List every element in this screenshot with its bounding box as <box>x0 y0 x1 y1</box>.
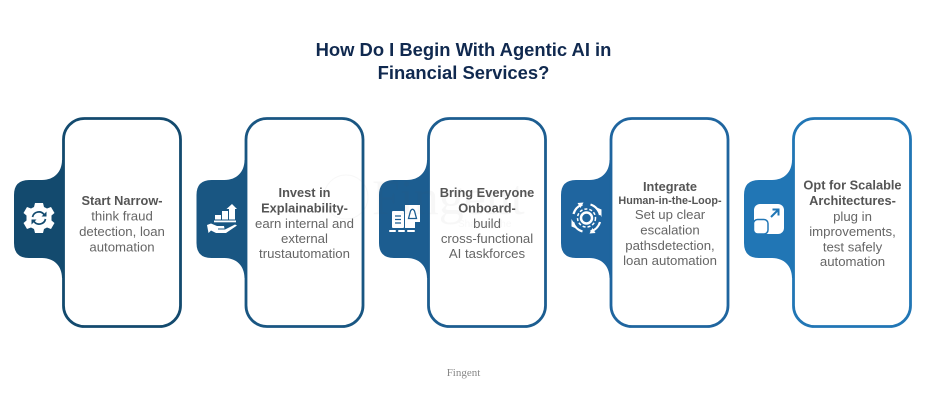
step 1 tab <box>14 160 66 278</box>
step 4 text: Human-in-the-Loop- <box>618 195 722 207</box>
step 2 text: trustautomation <box>259 246 350 261</box>
step 4 card <box>611 118 728 326</box>
footer brand: Fingent <box>447 367 480 379</box>
step 2 tab <box>196 160 248 278</box>
step 4 tab <box>561 160 614 278</box>
step 3 text: cross-functional <box>441 231 533 246</box>
step 2 text: external <box>281 231 328 246</box>
step 5 text: automation <box>820 254 885 269</box>
step 4 text: escalation <box>640 222 700 238</box>
watermark logo: Fingent <box>372 169 525 225</box>
step 5 text <box>803 178 902 269</box>
step 4 text: pathsdetection, <box>625 238 715 253</box>
step 3 text: Bring Everyone <box>440 185 534 200</box>
step 1 text: think fraud <box>91 208 153 224</box>
step 4 text <box>618 179 722 268</box>
step 1 text: detection, loan <box>79 224 165 239</box>
panel: step 5 opt for scalable architectures <box>744 118 910 326</box>
title <box>316 39 611 83</box>
step 4 text: Integrate <box>643 179 697 194</box>
step 3 tab <box>379 160 431 278</box>
step 5 text: Architectures- <box>809 193 896 208</box>
icon: circular arrows around gear <box>572 202 602 234</box>
step 1 text: automation <box>89 240 155 254</box>
step 5 text: improvements, <box>809 224 896 239</box>
step 2 card <box>246 118 363 326</box>
panel: step 3 bring everyone onboard <box>379 118 546 326</box>
step 4 text: Set up clear <box>635 207 706 222</box>
step 2 text <box>255 185 354 261</box>
step 3 text: Onboard- <box>458 200 516 216</box>
step 2 text: Invest in <box>279 185 331 200</box>
step 3 text: build <box>473 216 501 231</box>
panel: step 2 invest in explainability <box>196 118 363 326</box>
step 5 text: Opt for Scalable <box>803 178 902 192</box>
title: Financial Services? <box>378 62 549 83</box>
step 3 card <box>428 118 546 326</box>
panel: step 4 integrate human-in-the-loop <box>561 118 728 326</box>
icon: documents with bell <box>389 205 420 232</box>
step 1 text <box>79 193 165 254</box>
step 4 text: loan automation <box>623 253 717 268</box>
icon: hand holding growth chart <box>207 204 237 233</box>
panel: step 1 start narrow <box>14 118 180 326</box>
step 5 card <box>794 118 910 326</box>
icon: scale-up square with arrow <box>754 204 784 234</box>
step 5 tab <box>744 160 796 278</box>
step 5 text: plug in <box>833 209 872 224</box>
step 5 text: test safely <box>823 240 883 254</box>
step 3 text <box>440 185 534 261</box>
step 3 text: AI taskforces <box>449 246 526 261</box>
watermark logo <box>324 169 525 230</box>
title: How Do I Begin With Agentic AI in <box>316 39 611 60</box>
icon: gear with sync arrows <box>24 203 54 233</box>
watermark logo: Shaping the <box>458 219 512 230</box>
step 1 text: Start Narrow- <box>81 193 163 208</box>
step 2 text: Explainability- <box>261 200 348 216</box>
step 1 card <box>64 118 180 326</box>
step 2 text: earn internal and <box>255 216 354 231</box>
